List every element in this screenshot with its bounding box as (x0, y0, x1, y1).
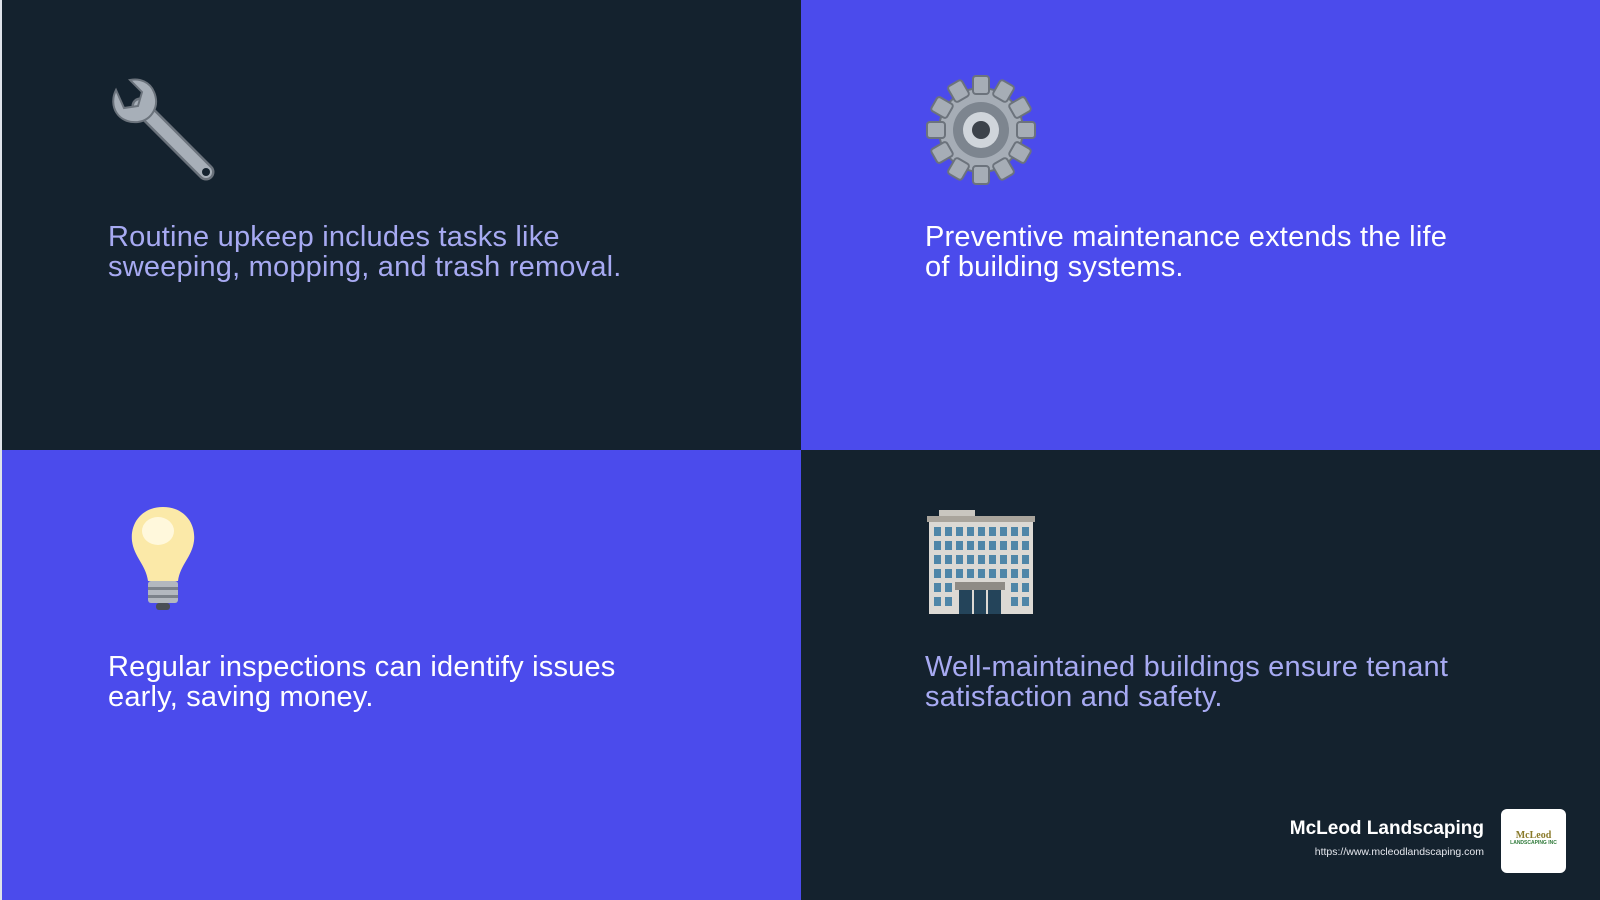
text: routine upkeep: sweeping, mopping, and trash removal. (108, 251, 622, 283)
text: preventive maintenance: Preventive maintenance extends the life (925, 221, 1447, 253)
logo: McLeod (1516, 830, 1551, 841)
icon: office building (927, 510, 1035, 614)
panel: routine upkeep (2, 0, 801, 450)
text: routine upkeep (108, 221, 622, 283)
text: regular inspections (108, 651, 616, 713)
logo (1501, 809, 1566, 873)
brand footer (1290, 809, 1566, 873)
text: regular inspections: early, saving money. (108, 681, 374, 713)
text: preventive maintenance: of building systems. (925, 251, 1184, 283)
text: regular inspections: Regular inspections can identify issues (108, 651, 616, 683)
brand url: https://www.mcleodlandscaping.com (1315, 846, 1484, 858)
icon: light bulb (132, 507, 194, 610)
text: well-maintained buildings (925, 651, 1448, 713)
logo: LANDSCAPING INC (1510, 840, 1557, 846)
panel: well-maintained buildings (801, 450, 1600, 900)
brand name: McLeod Landscaping (1290, 818, 1484, 839)
icon: gear (926, 75, 1036, 185)
panel: preventive maintenance (801, 0, 1600, 450)
panel: regular inspections (2, 450, 801, 900)
icon: wrench (112, 78, 214, 180)
text: well-maintained buildings: satisfaction and safety. (925, 681, 1223, 713)
text: preventive maintenance (925, 221, 1447, 283)
text: routine upkeep: Routine upkeep includes tasks like (108, 221, 560, 253)
text: well-maintained buildings: Well-maintained buildings ensure tenant (925, 651, 1448, 683)
